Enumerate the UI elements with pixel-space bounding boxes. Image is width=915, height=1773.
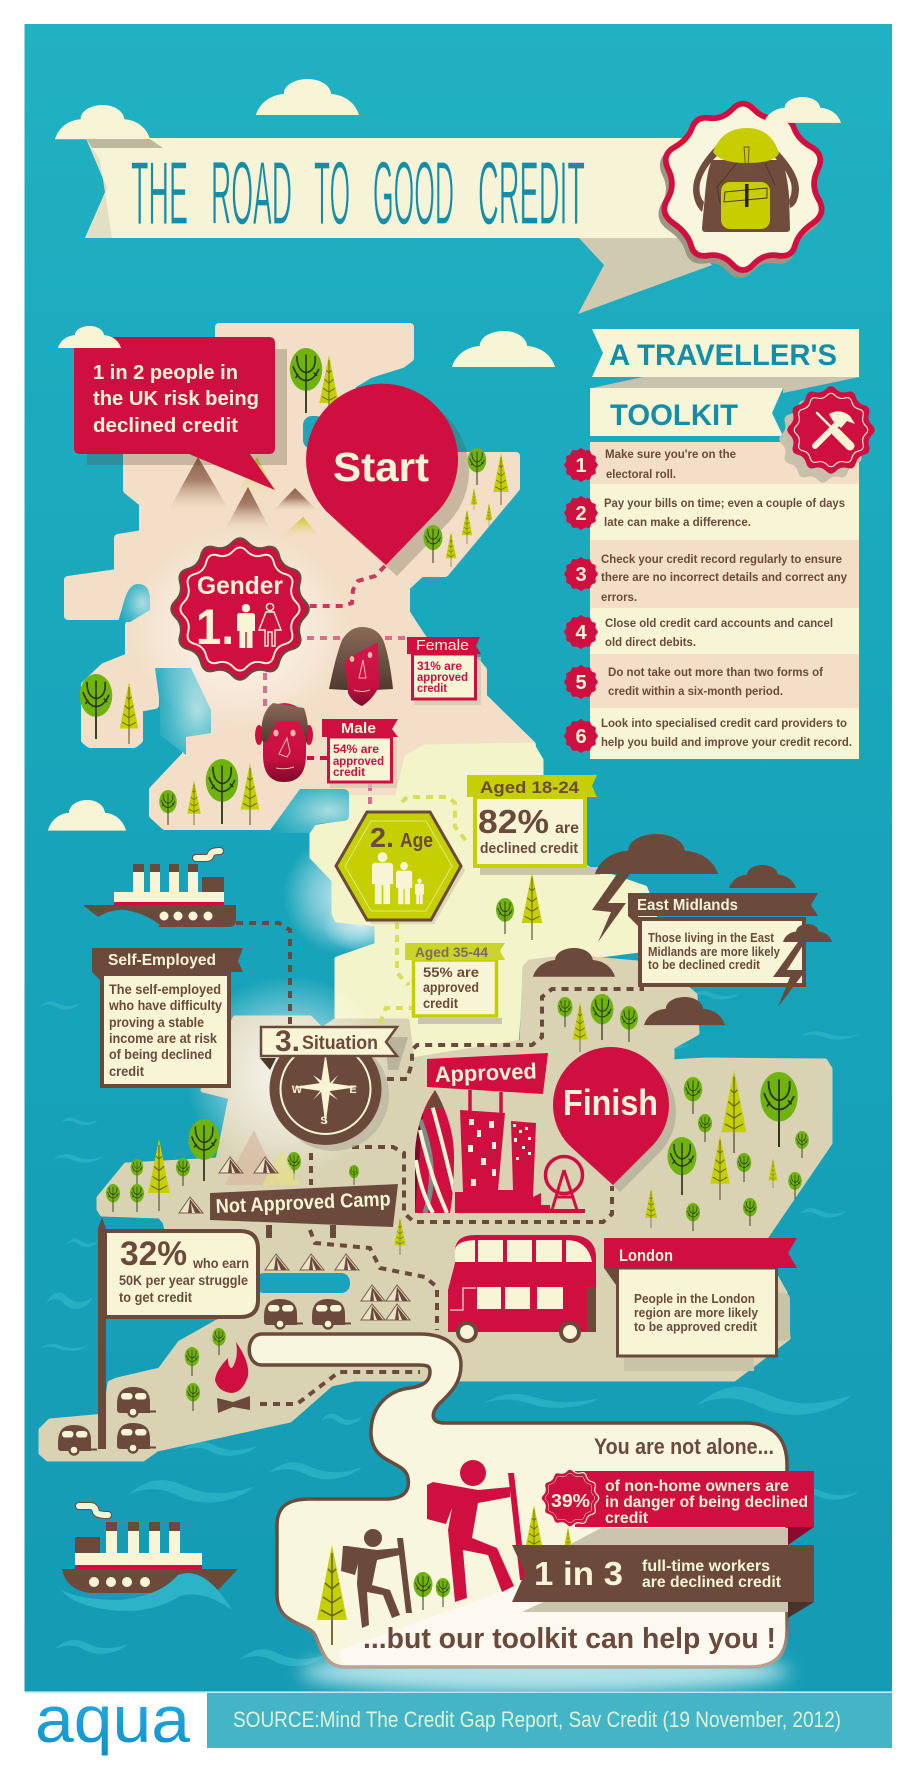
- toolkit: tips list: Close old credit card accounts and cancel: [605, 618, 833, 630]
- female label: 31% are: [417, 659, 462, 673]
- east midlands label: Those living in the East: [648, 931, 775, 945]
- brown ribbon: 1 in 3: [512, 1545, 814, 1618]
- ship: lower: [61, 1506, 238, 1611]
- toolkit: tips list: Do not take out more than two forms of: [608, 667, 823, 679]
- toolkit: tips list: credit within a six-month period.: [608, 686, 783, 698]
- gender badge: [171, 538, 309, 680]
- callout: 1 in 2 people: the UK risk being: [93, 388, 259, 410]
- aged 18-24 label: [467, 775, 600, 875]
- title text: [131, 143, 585, 243]
- london eye: [546, 1156, 582, 1210]
- self-employed label: The self-employed: [109, 982, 221, 997]
- east midlands label: to be declined credit: [648, 958, 761, 972]
- bottom trees: [317, 1505, 572, 1645]
- female label: Female: [416, 638, 469, 654]
- london label: to be approved credit: [634, 1320, 758, 1334]
- mountains: [166, 457, 323, 540]
- toolkit: number badges: 2: [575, 503, 587, 525]
- toolkit: tips list: old direct debits.: [605, 637, 696, 649]
- storm clouds and lightning: [533, 834, 796, 1025]
- brown ribbon: 1 in 3: full-time workers: [642, 1558, 770, 1575]
- compass: E: [349, 1084, 357, 1096]
- brown ribbon: 1 in 3: 1 in 3: [534, 1555, 623, 1592]
- gender badge: 1.: [196, 599, 234, 655]
- aged 35-44 label: Aged 35-44: [415, 945, 488, 960]
- toolkit: number badges: [564, 448, 598, 753]
- footer source bar: [24, 1691, 892, 1748]
- finish pin: Finish: [563, 1082, 658, 1123]
- cloud: callout: [58, 326, 121, 348]
- winding road: [249, 1334, 787, 1667]
- toolkit: number badges: 3: [575, 564, 587, 586]
- icon: hammer and screwdriver: [815, 411, 855, 446]
- trees: north: [80, 348, 339, 825]
- london label: region are more likely: [634, 1306, 758, 1320]
- 32 percent flag: [105, 1231, 258, 1317]
- land: southern England and Wales: [41, 957, 830, 1459]
- toolkit: number badges: 4: [575, 622, 587, 644]
- age hexagon: [336, 812, 465, 924]
- cloud: over badge: [764, 97, 841, 123]
- male label: Male: [341, 720, 376, 737]
- female label: [407, 637, 481, 705]
- aged 18-24 label: are: [555, 820, 579, 837]
- aged 35-44 label: 55% are: [423, 964, 479, 980]
- title text: GOOD: [373, 143, 454, 243]
- land: Scotland: [68, 327, 532, 826]
- compass: [270, 1033, 389, 1151]
- toolkit: tips list: Pay your bills on time; even a couple of days: [604, 498, 845, 510]
- gherkin: [415, 1090, 454, 1213]
- callout: 1 in 2 people: [74, 337, 287, 490]
- east midlands label: Midlands are more likely: [648, 945, 780, 959]
- 39 percent badge: 39%: [551, 1491, 590, 1511]
- toolkit: tips list: there are no incorrect details and correct any: [601, 572, 848, 584]
- 32 percent flag: 50K per year struggle: [119, 1272, 248, 1288]
- caravans: [58, 1299, 351, 1454]
- 32 percent flag: to get credit: [119, 1289, 192, 1305]
- compass mountains: [225, 1130, 300, 1185]
- finish pin: [553, 1047, 676, 1192]
- toolkit: heading banners: [590, 329, 859, 436]
- toolkit: tips list: Look into specialised credit card providers to: [601, 718, 847, 730]
- female label: approved: [417, 670, 468, 684]
- london bus: [448, 1235, 596, 1341]
- ship: upper: [78, 851, 236, 942]
- toolkit: tips list: Check your credit record regularly to ensure: [601, 554, 842, 566]
- tents: [179, 1157, 410, 1320]
- cloud: top left: [55, 105, 150, 139]
- title banner: [85, 138, 712, 314]
- situation ribbon: [260, 1025, 408, 1070]
- trees: beside start pin: [424, 448, 509, 567]
- white hill: [338, 1580, 785, 1665]
- toolkit: tools badge: [779, 386, 875, 483]
- toolkit: number badges: 1: [575, 455, 587, 477]
- icon: backpack: [693, 128, 799, 232]
- east midlands label: [628, 893, 818, 985]
- self-employed label: of being declined: [109, 1047, 212, 1062]
- age hexagon: Age: [400, 830, 433, 852]
- aged 18-24 label: declined credit: [480, 840, 578, 857]
- approved sign: Approved: [434, 1058, 537, 1087]
- toolkit: tips list: help you build and improve your credit record.: [601, 737, 852, 749]
- title text: THE: [131, 143, 188, 243]
- not approved camp sign: [210, 1184, 398, 1238]
- female face: [329, 627, 393, 706]
- start pin: [306, 384, 469, 576]
- london label: [604, 1238, 797, 1371]
- trees: midlands: [496, 872, 542, 940]
- situation ribbon: Situation: [302, 1033, 378, 1054]
- title text: TO: [314, 143, 350, 243]
- male label: approved: [333, 754, 384, 768]
- london label: People in the London: [634, 1292, 755, 1306]
- crimson ribbon: 39 percent: in danger of being declined: [605, 1494, 808, 1511]
- toolkit: heading banners: TOOLKIT: [610, 399, 738, 432]
- toolkit: tips list: electoral roll.: [606, 469, 676, 481]
- toolkit: number badges: 5: [575, 672, 587, 694]
- cloud: top centre: [256, 79, 359, 115]
- approved sign: [427, 1053, 548, 1094]
- coastal glow on water: [283, 835, 407, 955]
- title text: CREDIT: [478, 143, 585, 243]
- icon: man: [237, 604, 255, 648]
- red hiker: [427, 1460, 526, 1602]
- self-employed label: who have difficulty: [108, 998, 222, 1013]
- crimson ribbon: 39 percent: [541, 1469, 814, 1545]
- toolkit: tips list: late can make a difference.: [604, 517, 751, 529]
- aged 18-24 label: Aged 18-24: [480, 778, 580, 797]
- self-employed label: Self-Employed: [108, 952, 216, 969]
- start pin: Start: [333, 444, 429, 490]
- camp fire: [215, 1342, 250, 1413]
- dashed route: age: [380, 797, 468, 1023]
- not alone heading: You are not alone...: [594, 1434, 774, 1459]
- aged 35-44 label: [405, 943, 505, 1024]
- flag pole: [98, 1228, 106, 1449]
- title text: ROAD: [211, 143, 292, 243]
- male label: credit: [333, 765, 365, 779]
- trees: east and south: [106, 994, 809, 1411]
- toolkit: tips list: [590, 442, 859, 759]
- brown hiker: [341, 1529, 412, 1628]
- callout: 1 in 2 people: declined credit: [93, 415, 238, 437]
- pole tip: [98, 1217, 106, 1229]
- self-employed label: credit: [109, 1064, 144, 1079]
- female label: credit: [417, 681, 447, 695]
- dashed route: ship to situation: [236, 923, 290, 1027]
- compass: W: [292, 1084, 303, 1096]
- self-employed label: proving a stable: [109, 1015, 204, 1030]
- 32 percent flag: 32%: [120, 1235, 187, 1273]
- situation ribbon: 3.: [275, 1025, 300, 1058]
- gender badge: Gender: [197, 572, 283, 600]
- age hexagon: 2.: [370, 822, 394, 853]
- male label: [322, 719, 398, 788]
- aged 35-44 label: credit: [423, 995, 458, 1011]
- 39 percent badge: [541, 1469, 599, 1527]
- london label: London: [619, 1246, 673, 1265]
- cloud: lower left: [48, 800, 126, 831]
- backpack badge: [661, 104, 822, 275]
- compass: S: [320, 1115, 328, 1127]
- toolkit can help text: ...but our toolkit can help you !: [363, 1623, 776, 1655]
- ribbon shadows: [522, 1528, 788, 1612]
- toolkit: heading banners: A TRAVELLER'S: [609, 339, 837, 372]
- land: northern England: [312, 745, 655, 1062]
- aged 35-44 label: approved: [423, 979, 479, 995]
- dashed route: gender: [265, 566, 407, 810]
- crimson ribbon: 39 percent: of non-home owners are: [605, 1478, 789, 1495]
- east midlands label: East Midlands: [637, 897, 738, 914]
- london skyline: [412, 1088, 585, 1214]
- self-employed label: [92, 948, 243, 1086]
- brown ribbon: 1 in 3: are declined credit: [642, 1574, 781, 1591]
- male label: 54% are: [333, 742, 379, 756]
- small storm cloud on box: [773, 924, 832, 1007]
- cloud: right of start: [452, 331, 555, 367]
- icon: woman: [259, 603, 281, 646]
- sea waves: [40, 991, 860, 1666]
- toolkit: tips list: Make sure you're on the: [605, 449, 736, 461]
- toolkit: number badges: 6: [575, 726, 587, 748]
- callout: 1 in 2 people: 1 in 2 people in: [93, 362, 238, 384]
- winding road panel glow: [300, 1650, 790, 1694]
- icon: family: [372, 852, 424, 904]
- aged 18-24 label: 82%: [478, 803, 549, 840]
- toolkit: tips list: errors.: [601, 592, 637, 604]
- land glows: [130, 530, 395, 1175]
- male face: [255, 703, 313, 782]
- lakes and inlets: [118, 416, 350, 1293]
- 32 percent flag: who earn: [192, 1255, 249, 1271]
- aqua logo: aqua: [35, 1682, 190, 1756]
- self-employed label: income are at risk: [109, 1031, 217, 1046]
- dashed route: to finish: [260, 989, 644, 1404]
- crimson ribbon: 39 percent: credit: [605, 1510, 648, 1527]
- not approved camp sign: Not Approved Camp: [215, 1188, 391, 1218]
